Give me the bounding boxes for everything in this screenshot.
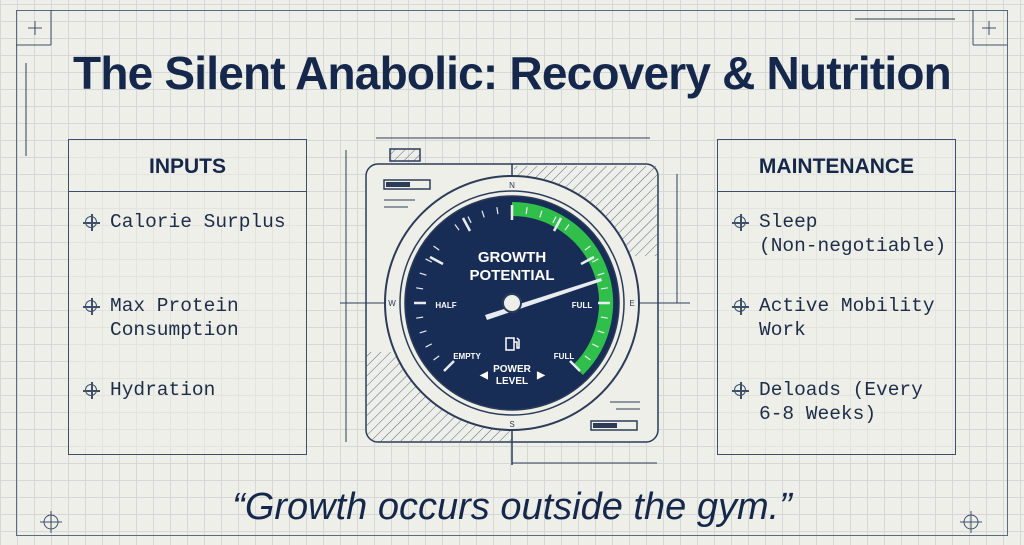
gauge dial: S bbox=[509, 420, 515, 429]
gauge dial: W bbox=[388, 299, 396, 308]
heading: maintenance bbox=[718, 140, 955, 192]
gauge dial: E bbox=[629, 299, 635, 308]
title: The Silent Anabolic: Recovery & Nutrition bbox=[73, 47, 951, 99]
item: max protein bbox=[85, 294, 239, 342]
panel: maintenance bbox=[717, 139, 956, 455]
item: max protein: Consumption bbox=[110, 319, 239, 341]
gauge dial: GROWTH bbox=[478, 249, 546, 266]
item: hydration: Hydration bbox=[110, 379, 215, 401]
item: max protein: Max Protein bbox=[110, 295, 239, 317]
item: deloads: 6-8 Weeks) bbox=[759, 403, 876, 425]
item: sleep bbox=[734, 210, 946, 258]
item: mobility: Active Mobility bbox=[759, 295, 935, 317]
quote: “Growth occurs outside the gym.” bbox=[232, 486, 792, 528]
item: sleep: (Non-negotiable) bbox=[759, 235, 946, 257]
gauge dial: HALF bbox=[435, 301, 457, 310]
item: mobility bbox=[734, 294, 935, 342]
icon: fuel pump bbox=[506, 338, 519, 350]
gauge dial: ◀ bbox=[479, 370, 488, 381]
gauge dial: POTENTIAL bbox=[470, 267, 554, 284]
panel: inputs bbox=[68, 139, 307, 455]
gauge dial: FULL bbox=[554, 352, 574, 361]
item: mobility: Work bbox=[759, 319, 806, 341]
gauge dial: LEVEL bbox=[496, 376, 528, 387]
heading: inputs bbox=[69, 140, 306, 192]
gauge dial: N bbox=[509, 181, 515, 190]
gauge dial: EMPTY bbox=[453, 352, 481, 361]
item: calorie surplus: Calorie Surplus bbox=[110, 211, 286, 233]
gauge dial: ▶ bbox=[536, 370, 546, 381]
heading: inputs: INPUTS bbox=[149, 155, 226, 178]
heading: maintenance: MAINTENANCE bbox=[759, 155, 914, 178]
gauge dial: FULL bbox=[572, 301, 592, 310]
gauge dial bbox=[385, 176, 639, 430]
item: deloads bbox=[734, 378, 923, 426]
gauge dial: POWER bbox=[493, 364, 532, 375]
item: deloads: Deloads (Every bbox=[759, 379, 923, 401]
item: sleep: Sleep bbox=[759, 211, 818, 233]
